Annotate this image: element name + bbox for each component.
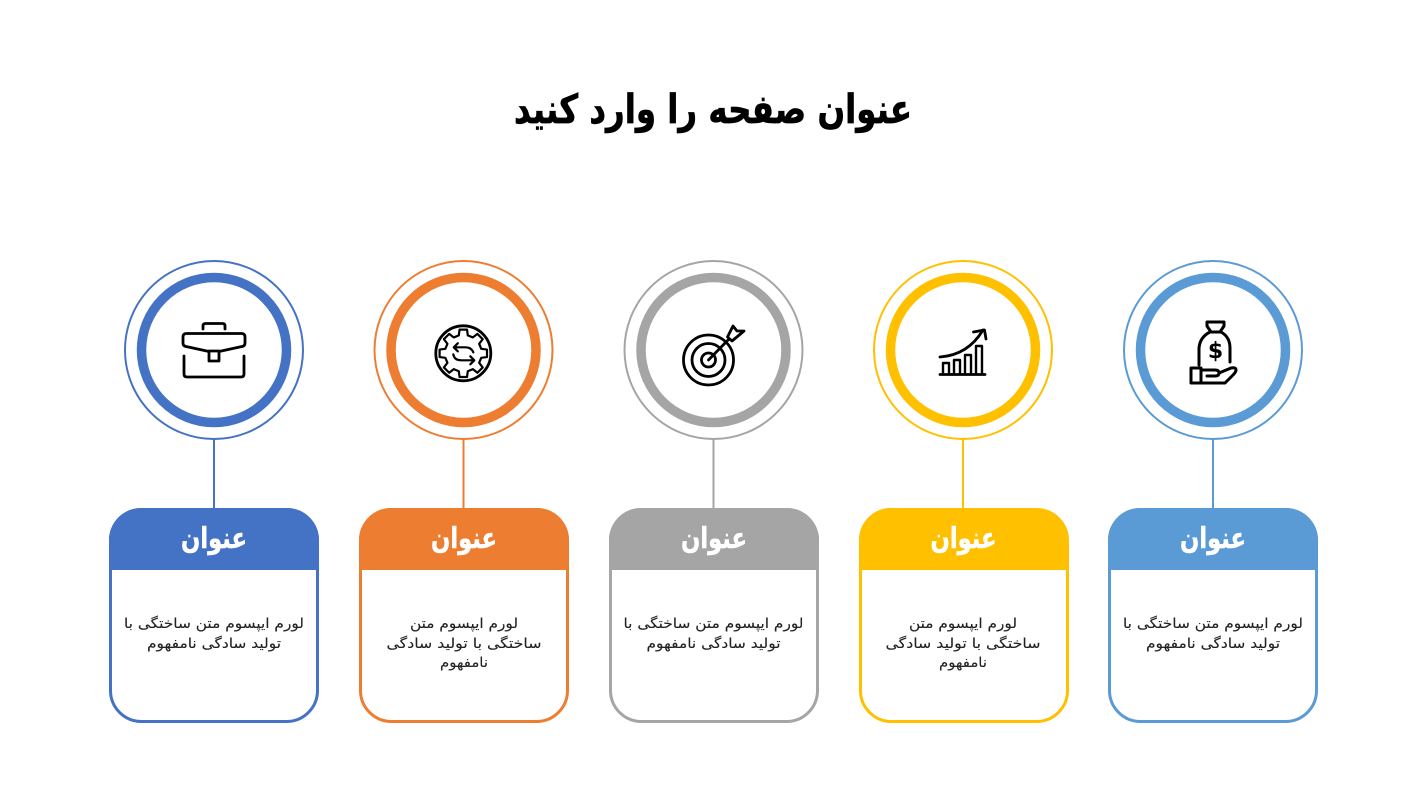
outer and inner rings — [874, 261, 1052, 439]
card header — [609, 508, 819, 570]
card header — [1108, 508, 1318, 570]
icon: dollar sign: $ — [1208, 339, 1223, 364]
icon: target with arrow — [684, 326, 744, 385]
card header — [859, 508, 1066, 570]
card body — [110, 510, 318, 722]
card text: لورم ایپسوم متن — [909, 616, 1017, 632]
icon: growth chart — [940, 330, 986, 374]
outer and inner rings — [125, 261, 303, 439]
card body — [1110, 510, 1316, 722]
panel: step 3 grey — [609, 261, 819, 722]
outer and inner rings — [1124, 261, 1302, 439]
icon: gear with arrows — [436, 326, 491, 381]
card text: ساختگی با تولید سادگی — [386, 635, 542, 652]
card header — [359, 508, 569, 570]
connector line — [1212, 439, 1214, 509]
card body — [860, 510, 1068, 722]
card text: لورم ایپسوم متن ساختگی با — [1123, 615, 1303, 632]
title: عنوان صفحه را وارد کنید — [514, 87, 912, 133]
icon: briefcase — [183, 324, 245, 377]
card text: تولید سادگی نامفهوم — [1146, 635, 1280, 652]
connector line — [462, 439, 464, 509]
card text: ساختگی با تولید سادگی — [886, 635, 1040, 652]
connector line — [213, 439, 215, 509]
panel: step 2 orange — [359, 261, 569, 722]
card heading: عنوان — [1180, 521, 1246, 555]
card text: لورم ایپسوم متن ساختگی با — [124, 615, 304, 632]
outer and inner rings — [624, 261, 802, 439]
card text — [624, 615, 804, 652]
card text — [386, 616, 542, 671]
card heading: عنوان — [431, 521, 497, 555]
card text: لورم ایپسوم متن — [410, 616, 518, 632]
icon: money bag in hand — [1191, 322, 1236, 383]
connector line — [962, 439, 964, 509]
card text: نامفهوم — [939, 655, 987, 671]
card text — [886, 616, 1040, 671]
card text: تولید سادگی نامفهوم — [646, 635, 781, 652]
card heading: عنوان — [681, 521, 747, 555]
connector line — [712, 439, 714, 509]
card text: لورم ایپسوم متن ساختگی با — [624, 615, 804, 632]
card text: نامفهوم — [440, 655, 488, 671]
card heading: عنوان — [930, 521, 996, 555]
panel: step 4 yellow — [859, 261, 1068, 722]
card text: تولید سادگی نامفهوم — [147, 635, 281, 652]
card heading: عنوان — [181, 521, 247, 555]
panel: step 1 blue — [109, 261, 319, 722]
card text — [124, 615, 304, 652]
panel: step 5 light blue — [1108, 261, 1318, 722]
outer and inner rings — [374, 261, 552, 439]
card header — [109, 508, 319, 570]
card text — [1123, 615, 1303, 652]
card body — [610, 510, 818, 722]
card body — [360, 510, 568, 722]
